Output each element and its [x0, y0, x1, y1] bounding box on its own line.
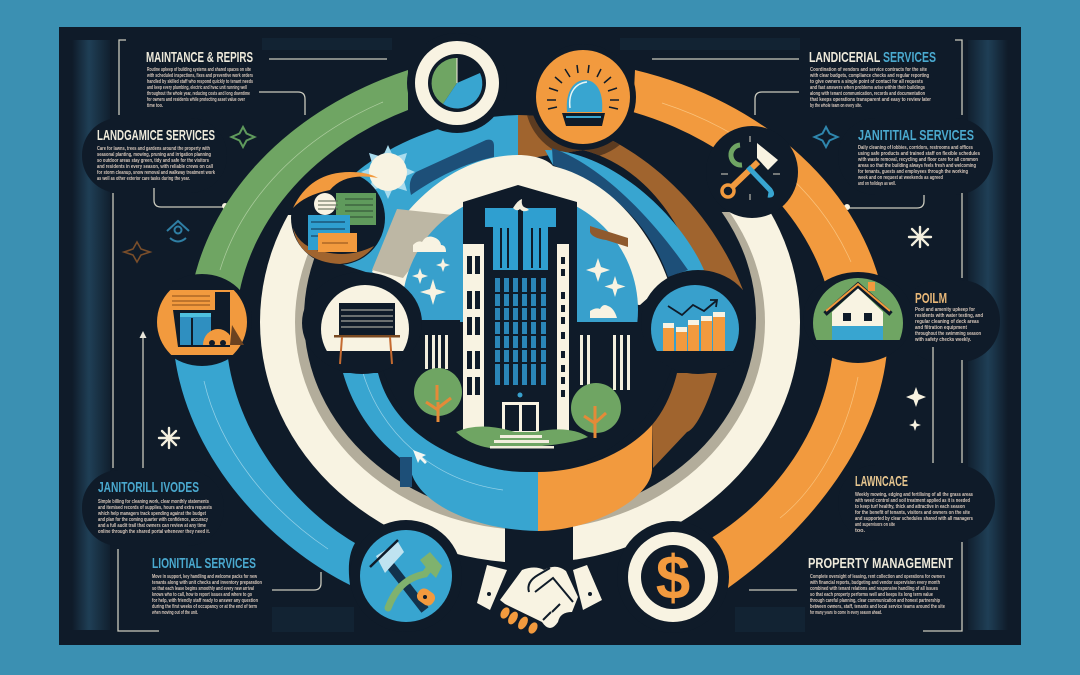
text block: lawncare: and supported by clear schedules shared with all managers: [855, 516, 973, 522]
text block: landscape services: Care for lawns, trees and gardens around the property with: [97, 146, 210, 152]
inner ring: orange bottom: [538, 425, 652, 531]
connector dots: [222, 203, 850, 210]
board lines: [341, 310, 393, 327]
cream crescent: [372, 155, 668, 305]
icon: document stack: [291, 171, 385, 265]
wrench jaw: [420, 552, 442, 578]
text block: lionitial services: for help, with friendly staff ready to answer any question: [152, 598, 258, 604]
green spanner: [731, 145, 742, 165]
taupe wedge: [372, 209, 453, 278]
text block: janitorial services: JANITITIAL SERVICES: [858, 127, 974, 144]
text block: landscape services: for storm cleanup, snow removal and walkway treatment work: [97, 170, 215, 176]
building: main tower: [463, 185, 577, 433]
outer arc: orange bottom: [708, 350, 887, 588]
arrow head on left line: [140, 331, 146, 338]
left tower windows: [467, 256, 480, 395]
inner ring: blue bottom: [343, 373, 538, 531]
text block: landicerial services: [809, 49, 936, 109]
text block: property management: combined with tenant relations and responsive handling of all issues: [810, 586, 938, 592]
text block: landicerial services: LANDICERIAL SERVICES: [809, 49, 936, 66]
inner ring: brown top: [518, 115, 743, 290]
text block: landicerial services: along with tenant communication, records and documentation: [810, 91, 925, 97]
connector lines and brackets: [113, 40, 962, 631]
text block: lionitial services: Move in support, key handling and welcome packs for new: [152, 574, 258, 580]
tower cream columns: [463, 244, 569, 432]
green document: [336, 193, 376, 225]
inner ring: blue top: [335, 115, 518, 275]
cloud right: [590, 305, 617, 318]
handle shadow: [390, 565, 425, 610]
text block: maintenance and repairs: with scheduled inspections, fixes and preventive work orders: [146, 73, 253, 79]
wheels: [209, 340, 226, 346]
text block: property management: PROPERTY MANAGEMENT: [808, 555, 953, 572]
tree left: [414, 368, 462, 422]
text block: landicerial services: and fast answers when problems arise within their buildings: [810, 85, 925, 91]
text block: janitorial services: areas so that the building always feels fresh and welcoming: [858, 163, 976, 169]
cream ring right: [573, 212, 800, 560]
dollar sign: $: [656, 544, 690, 613]
icon: blue house mark: [167, 221, 189, 242]
text block: landscape services: seasonal planting, mowing, pruning and irrigation planning: [97, 152, 211, 158]
text block: poilm: regular cleaning of deck areas: [915, 319, 979, 325]
text block: landicerial services: Coordination of vendors and service contracts for the site: [810, 67, 927, 73]
cream ring left: [260, 215, 505, 562]
text block: maintenance and repairs: throughout the whole year, reducing costs and long downtime: [147, 91, 250, 97]
stack rim: [293, 172, 378, 208]
brush head: [370, 540, 404, 573]
icon: rising bar chart: [647, 270, 743, 374]
roof: [825, 285, 891, 314]
texture: left column: [72, 40, 110, 630]
table top: [334, 335, 400, 338]
text block: maintenance and repairs: [146, 49, 253, 109]
text block: landicerial services: that keeps operations transparent and easy to review later: [810, 97, 932, 103]
text block: maintenance and repairs: for owners and residents while protecting asset value over: [147, 97, 246, 103]
left cuff: [477, 565, 507, 610]
finger lines: [528, 568, 573, 620]
icon: bench board: [302, 272, 422, 374]
text block: lawncare: LAWNCACE: [855, 473, 908, 490]
text block: property management: [808, 555, 953, 616]
text block: lawncare: to keep turf healthy, thick and attractive in each season: [855, 504, 965, 510]
hammer head: [757, 143, 778, 170]
text block: lawncare: Weekly mowing, edging and fertilising of all the grass areas: [855, 492, 973, 498]
icon: brown star: [124, 242, 150, 262]
stack base rim: [293, 228, 374, 264]
text block: lionitial services: when moving out of the unit.: [151, 610, 198, 616]
text block: poilm: with safety checks weekly.: [914, 337, 971, 343]
blue box: [180, 313, 211, 345]
outer arc: orange top: [633, 70, 884, 300]
dome: [203, 329, 233, 345]
text block: landicerial services: by the whole team on every site.: [810, 103, 862, 109]
icon: light bulb: [530, 44, 636, 150]
ornament: [513, 199, 529, 211]
cloud left: [413, 237, 446, 252]
bulb highlight: [570, 82, 587, 108]
tree right: [571, 383, 621, 438]
inner dark disk: [466, 460, 536, 472]
table legs: [340, 337, 392, 364]
text block: lawncare: [854, 473, 973, 534]
icon: sparkles right: [906, 387, 926, 431]
text block: lawncare: too.: [855, 528, 865, 534]
inner ring: blue and navy strips: [545, 148, 704, 277]
right cuff: [573, 565, 602, 610]
text block: janitorial invoices: Simple billing for cleaning work, clear monthly statements: [98, 499, 209, 505]
text block: landscape services: LANDGAMICE SERVICES: [97, 127, 215, 144]
text block: maintenance and repairs: time too.: [147, 103, 163, 109]
blue document: [308, 215, 350, 250]
text block: maintenance and repairs: MAINTANCE & REPIRS: [146, 49, 253, 66]
bulb base: [562, 113, 605, 126]
icon: orange box and dome: [157, 274, 247, 366]
text block: poilm: Pool and amenity upkeep for: [915, 307, 976, 313]
bulb glass: [567, 80, 602, 112]
sun: [361, 145, 415, 199]
text block: landicerial services: to give owners a single point of contact for all requests: [810, 79, 923, 85]
window grid: [495, 278, 546, 385]
text block: janitorial services: using safe products and trained staff on flexible schedules: [858, 151, 980, 157]
orange fingers: [499, 606, 539, 635]
blue pool: [832, 326, 883, 340]
text block: property management: so that each property performs well and keeps its long term value: [810, 592, 933, 598]
chimney: [868, 282, 875, 291]
icon: handshake: [477, 565, 602, 635]
text block: janitorial services: with waste removal, recycling and floor care for all common: [857, 157, 978, 163]
text block: property management: with financial reports, budgeting and vendor supervision every month: [809, 580, 940, 586]
text block: lionitial services: during the first weeks of occupancy or at the end of term: [152, 604, 257, 610]
header lines: [172, 296, 210, 305]
window grid rows: [494, 292, 547, 364]
orange document: [318, 233, 357, 252]
board: [339, 303, 395, 335]
building: side wings: [420, 320, 640, 392]
orange tag: [415, 586, 437, 608]
text block: maintenance and repairs: and keep every plumbing, electric and hvac unit running well: [147, 85, 247, 91]
text block: poilm: and filtration equipment: [915, 325, 967, 331]
text block: lionitial services: tenants along with unit checks and inventory preparation: [152, 580, 262, 586]
text block: janitorial services: for tenants, guests and employees through the working: [858, 169, 968, 175]
green wrench: [388, 562, 434, 608]
speech bubble: [314, 193, 338, 215]
navy patch on blue arc: [410, 140, 494, 195]
cursor arrow: [413, 450, 427, 464]
text block: janitorial invoices: and a full audit trail that owners can review at any time: [98, 523, 206, 529]
trend arrow: [668, 300, 717, 315]
text block: lionitial services: LIONITIAL SERVICES: [152, 555, 256, 572]
cuff buttons: [487, 592, 592, 596]
text block: poilm: [914, 290, 983, 343]
inner ring: brown bottom: [652, 373, 717, 468]
sky sparkles: [412, 258, 626, 305]
outer arc: blue: [175, 350, 355, 585]
text block: property management: between owners, staff, tenants and local service teams around the site: [810, 604, 945, 610]
door lamp: [518, 392, 522, 398]
text block: landscape services: so outdoor areas stay green, tidy and safe for the visitors: [97, 158, 209, 164]
capital slits: [500, 228, 541, 268]
text block: poilm: POILM: [915, 290, 947, 307]
text block: poilm: residents with water testing, and: [915, 313, 983, 319]
icon: pie chart: [407, 33, 507, 133]
blue capitals: [485, 208, 556, 270]
text block: landscape services: and residents in every season, with reliable crews on call: [97, 164, 213, 170]
icon: dollar coin: [617, 521, 729, 633]
text block: property management: for many years to come in every season ahead.: [810, 610, 882, 616]
dark recess: [173, 292, 230, 347]
texture: top and bottom bands: [262, 38, 805, 632]
outer arc: green: [190, 70, 408, 300]
bar caps: [663, 312, 725, 332]
icon: brush and wrench: [350, 520, 462, 632]
text block: janitorial invoices: and itemised records of supplies, hours and extra requests: [98, 505, 212, 511]
text block: janitorial invoices: which help managers track spending against the budget: [97, 511, 206, 517]
texture: right column: [968, 40, 1008, 630]
text block: property management: Complete oversight of leasing, rent collection and operations for owners: [810, 574, 945, 580]
text block: lionitial services: knows who to call, how to report issues and where to go: [152, 592, 252, 598]
icon: snowflake left: [159, 428, 179, 448]
sky: [404, 206, 638, 322]
text block: lionitial services: so that each lease begins smoothly and every new arrival: [152, 586, 254, 592]
icon: blue star: [814, 127, 838, 147]
brown awning: [590, 226, 628, 247]
steps: [490, 435, 554, 448]
text block: lawncare: with weed control and soil treatment applied as it is needed: [854, 498, 970, 504]
text block: lionitial services: [151, 555, 262, 616]
text block: janitorial services: week and on request at weekends as agreed: [857, 175, 943, 181]
bulb rays: [547, 65, 619, 109]
blue wrench: [748, 167, 772, 195]
text block: landscape services: [97, 127, 215, 182]
icon: green star: [232, 127, 254, 147]
text block: maintenance and repairs: Routine upkeep of building systems and shared spaces on site: [147, 67, 251, 73]
text block: landscape services: as well as other exterior care tasks during the year.: [97, 176, 190, 182]
windows: [843, 313, 872, 321]
icon: wrench and hammer: [706, 126, 798, 218]
text block: janitorial invoices: JANITORILL IVODES: [98, 479, 199, 496]
text block: janitorial invoices: and plan for the coming quarter with confidence, accuracy: [98, 517, 208, 523]
text block: lawncare: and supervisors on site: [855, 522, 895, 528]
door: [502, 402, 539, 433]
text block: janitorial invoices: online through the shared portal whenever they need it.: [98, 529, 210, 535]
hands: [500, 567, 578, 628]
roof trim: [826, 284, 890, 311]
text block: lawncare: for the benefit of tenants, visitors and owners on the site: [855, 510, 970, 516]
right tower windows: [561, 257, 565, 397]
text backing blobs: [82, 118, 1000, 546]
icon: house: [813, 272, 903, 363]
ticks: [721, 136, 780, 200]
icon: snowflake right: [909, 227, 931, 247]
text block: property management: through careful planning, clear communication and honest partnership: [810, 598, 941, 604]
brown wedge: [230, 325, 244, 345]
bars: [663, 312, 725, 351]
lawn: [456, 426, 588, 448]
bulb shadow on brown: [527, 115, 620, 156]
house wall: [832, 288, 883, 340]
text block: janitorial services: and on holidays as well.: [858, 181, 896, 187]
text block: poilm: throughout the swimming season: [915, 331, 981, 337]
orange wrench: [722, 162, 758, 197]
text block: maintenance and repairs: handled by skilled staff who respond quickly to tenant needs: [147, 79, 253, 85]
text block: janitorial services: [857, 127, 980, 187]
text block: landicerial services: with clear budgets, compliance checks and regular reporting: [809, 73, 929, 79]
text block: janitorial invoices: [97, 479, 212, 535]
text block: janitorial services: Daily cleaning of lobbies, corridors, restrooms and offices: [858, 145, 973, 151]
